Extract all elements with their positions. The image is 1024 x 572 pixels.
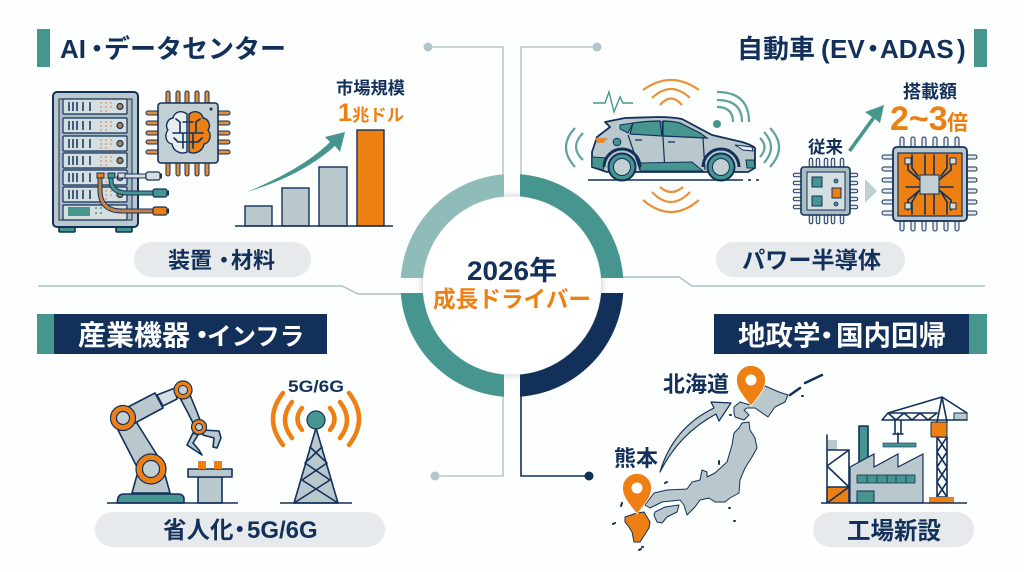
- icon: cables: [97, 172, 169, 215]
- central ring diagram: [401, 174, 623, 397]
- pill: labor saving and 5G/6G: 5G/6G: [247, 517, 318, 544]
- connector: right line: [622, 277, 985, 286]
- connector: bottom-left line: [430, 396, 503, 480]
- icon: signal tower: [273, 393, 359, 503]
- icon: power semiconductor chip: [884, 139, 975, 229]
- heading: automotive: 自動車: [737, 34, 815, 64]
- heading: industrial: インフラ: [207, 324, 304, 351]
- heading: automotive: ・: [860, 34, 886, 64]
- label: Kumamoto: 熊本: [614, 446, 658, 471]
- arrow: growth trend: [247, 132, 345, 192]
- heading: automotive: [737, 29, 987, 67]
- heading: automotive: ): [957, 34, 966, 64]
- heading: geopolitics: ・: [813, 320, 840, 351]
- icon: factory and crane: [821, 397, 967, 503]
- pill: labor saving and 5G/6G: ・: [228, 517, 252, 543]
- connector: bottom-right line: [521, 396, 594, 480]
- heading: AI data center: [37, 29, 286, 67]
- value: 2 to 3 times: 倍: [947, 112, 968, 135]
- label: Hokkaido: 北海道: [663, 372, 729, 397]
- icon: server rack: [53, 92, 138, 232]
- heading: industrial: ・: [188, 320, 216, 351]
- arrow: growth: [848, 105, 884, 152]
- connector: left line: [38, 286, 402, 294]
- label: market size: 市場規模: [336, 78, 405, 98]
- sub-element: gripper: [187, 430, 221, 455]
- map: Japan: [613, 375, 822, 550]
- panel: automotive: [566, 29, 987, 277]
- icon: conventional chip: [795, 160, 856, 222]
- panel: geopolitics and reshoring: [613, 314, 987, 550]
- icon: AI brain chip: [148, 93, 228, 174]
- pin: Kumamoto: [622, 473, 652, 514]
- heading: geopolitics: [714, 314, 987, 354]
- heading: AI data center: AI: [60, 34, 86, 64]
- sub-element: work table: [188, 461, 232, 503]
- heading: automotive: ADAS: [880, 34, 954, 64]
- pill: power semiconductors: [716, 242, 905, 277]
- heading: AI data center: ・: [84, 34, 110, 64]
- arrow: Kumamoto to Hokkaido: [660, 402, 731, 472]
- value: 1 trillion dollars: 1兆ドル: [338, 99, 404, 127]
- icon: connected car: [566, 80, 779, 212]
- pill: power semiconductors: パワー半導体: [742, 247, 881, 273]
- heading: AI data center: データセンター: [104, 34, 286, 64]
- label: conventional: 従来: [808, 138, 843, 157]
- value: 2 to 3 times: 2~3: [890, 100, 948, 138]
- arrow: chip upgrade: [865, 179, 877, 203]
- pill: labor saving and 5G/6G: 省人化: [163, 517, 234, 543]
- heading: industrial: [37, 314, 327, 354]
- center title: growth drivers: 成長ドライバー: [433, 286, 591, 312]
- connector: top-left line: [424, 42, 503, 176]
- center title: year: 2026年: [467, 256, 557, 286]
- pill: equipment and materials: 装置: [168, 248, 212, 273]
- icon: robot arm: [107, 381, 238, 503]
- heading: automotive: (: [821, 34, 830, 64]
- heading: industrial: 産業機器: [78, 320, 190, 351]
- heading: automotive: EV: [830, 34, 865, 64]
- pill: new factories: [813, 512, 974, 547]
- panel: AI data center: [37, 29, 405, 277]
- pill: equipment and materials: 材料: [231, 248, 275, 273]
- connector: top-right line: [521, 42, 602, 176]
- label: 5G/6G: 5G/6G: [288, 377, 344, 396]
- label: content value: 搭載額: [903, 82, 957, 102]
- pill: new factories: 工場新設: [847, 518, 941, 545]
- heading: geopolitics: 国内回帰: [836, 320, 946, 351]
- pill: equipment and materials: ・: [213, 248, 235, 273]
- heading: geopolitics: 地政学: [738, 320, 820, 351]
- pill: equipment and materials: [134, 242, 311, 277]
- pin: Hokkaido: [736, 366, 766, 406]
- panel: industrial equipment and infrastructure: [37, 314, 385, 547]
- bar chart: market size: [235, 78, 405, 226]
- pill: labor saving and 5G/6G: [95, 512, 385, 547]
